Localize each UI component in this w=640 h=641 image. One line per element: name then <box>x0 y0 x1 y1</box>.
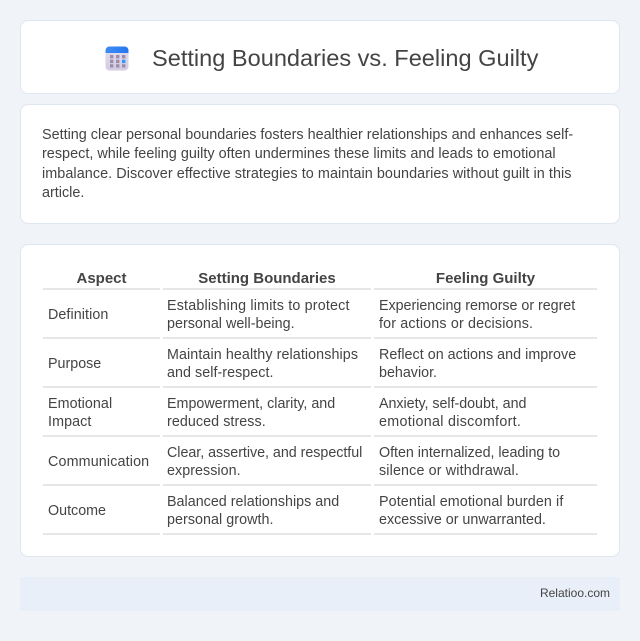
row: definition: Definition <box>48 307 108 323</box>
intro text: imbalance. Discover effective strategies to maintain boundaries without guilt in this <box>42 166 572 182</box>
row: communication: Often internalized, leading to <box>379 445 560 461</box>
row: definition: Experiencing remorse or regret <box>379 298 575 314</box>
table panel <box>20 244 620 557</box>
header panel <box>20 20 620 94</box>
row: communication: Communication <box>48 454 149 470</box>
row: purpose: behavior. <box>379 365 437 381</box>
intro text: respect, while feeling guilty often undermines these limits and leads to emotional <box>42 146 556 162</box>
row: purpose: and self-respect. <box>167 365 274 381</box>
row: communication: expression. <box>167 463 241 479</box>
row: purpose: Purpose <box>48 356 101 372</box>
row: purpose <box>48 347 576 381</box>
table header: Feeling Guilty <box>436 270 535 287</box>
intro text <box>42 127 573 201</box>
row: definition <box>48 298 576 332</box>
title: Setting Boundaries vs. Feeling Guilty <box>152 45 538 71</box>
row: emotional impact <box>48 396 526 430</box>
row: communication: Clear, assertive, and respectful <box>167 445 362 461</box>
row: emotional impact: Empowerment, clarity, and <box>167 396 335 412</box>
row: outcome: Potential emotional burden if <box>379 494 563 510</box>
row: outcome: Outcome <box>48 503 106 519</box>
row: definition: personal well-being. <box>167 316 295 332</box>
row: emotional impact: emotional discomfort. <box>379 414 521 430</box>
icon: calendar <box>106 46 128 70</box>
row: communication <box>48 445 560 479</box>
row: definition: Establishing limits to protect <box>167 298 350 314</box>
row: outcome: Balanced relationships and <box>167 494 339 510</box>
row: emotional impact: reduced stress. <box>167 414 266 430</box>
table header <box>76 270 535 287</box>
row: emotional impact: Emotional <box>48 396 112 412</box>
row: emotional impact: Impact <box>48 414 92 430</box>
row: purpose: Maintain healthy relationships <box>167 347 358 363</box>
row: communication: silence or withdrawal. <box>379 463 519 479</box>
footer <box>20 577 620 611</box>
intro text: Setting clear personal boundaries fosters healthier relationships and enhances self- <box>42 127 573 143</box>
intro text: article. <box>42 185 84 201</box>
intro panel <box>20 104 620 224</box>
table header: Setting Boundaries <box>198 270 336 287</box>
row: outcome <box>48 494 564 528</box>
row: outcome: personal growth. <box>167 512 274 528</box>
row: emotional impact: Anxiety, self-doubt, and <box>379 396 526 412</box>
row: definition: for actions or decisions. <box>379 316 533 332</box>
table header: Aspect <box>76 270 127 287</box>
row: outcome: excessive or unwarranted. <box>379 512 546 528</box>
footer text: Relatioo.com <box>540 586 610 600</box>
row: purpose: Reflect on actions and improve <box>379 347 576 363</box>
